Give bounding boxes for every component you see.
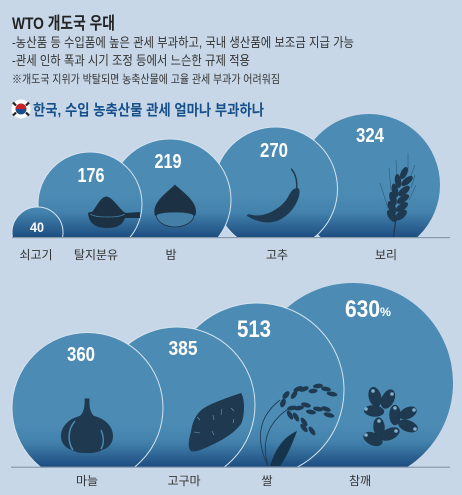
title: WTO 개도국 우대 — [12, 14, 115, 33]
values: row 2 — [67, 296, 391, 366]
labels: row 1: 보리 — [375, 248, 397, 262]
description text: -농산품 등 수입품에 높은 관세 부과하고, 국내 생산품에 보조금 지급 가능 — [12, 35, 354, 50]
values: row 2: 513 — [237, 316, 271, 343]
values: row 1: 176 — [78, 165, 104, 187]
chart: row 1 circles — [12, 114, 440, 237]
icon: barley — [380, 153, 416, 237]
description text — [12, 35, 354, 86]
icon: sesame seeds — [361, 386, 419, 449]
values: row 1 — [30, 125, 385, 235]
description text: -관세 인하 폭과 시기 조정 등에서 느슨한 규제 적용 — [12, 53, 250, 68]
labels: row 1: 탈지분유 — [74, 248, 118, 262]
icon: garlic — [61, 398, 113, 453]
values: row 2: 385 — [168, 338, 198, 360]
labels: row 1 — [19, 248, 397, 262]
icon: sweet potato — [189, 393, 244, 451]
description text: ※개도국 지위가 박탈되면 농축산물에 고율 관세 부과가 어려워짐 — [12, 72, 280, 86]
values: row 2: % — [380, 305, 391, 319]
labels: row 2: 쌀 — [261, 474, 273, 488]
labels: row 1: 쇠고기 — [19, 248, 53, 262]
icon: chili — [247, 168, 300, 222]
values: row 1: 40 — [30, 219, 44, 235]
baseline: row 1 — [12, 237, 450, 238]
icon: Korean flag — [12, 100, 30, 118]
values: row 1: 324 — [356, 125, 385, 147]
icon: rice — [260, 383, 338, 466]
baseline: row 2 — [11, 467, 450, 468]
subtitle: 한국, 수입 농축산물 관세 얼마나 부과하나 — [33, 102, 264, 119]
values: row 2: 630 — [345, 296, 380, 323]
values: row 2: 360 — [67, 344, 95, 366]
icon: chestnut — [154, 184, 196, 227]
labels: row 2: 고구마 — [167, 474, 201, 488]
labels: row 2 — [76, 474, 371, 488]
labels: row 1: 고추 — [266, 248, 288, 262]
labels: row 2: 마늘 — [76, 474, 98, 488]
values: row 1: 270 — [260, 140, 288, 162]
icon: scoop — [88, 196, 140, 228]
values: row 1: 219 — [154, 151, 182, 173]
chart: row 2 circles — [12, 283, 453, 484]
labels: row 1: 밤 — [165, 248, 177, 262]
labels: row 2: 참깨 — [349, 474, 371, 488]
